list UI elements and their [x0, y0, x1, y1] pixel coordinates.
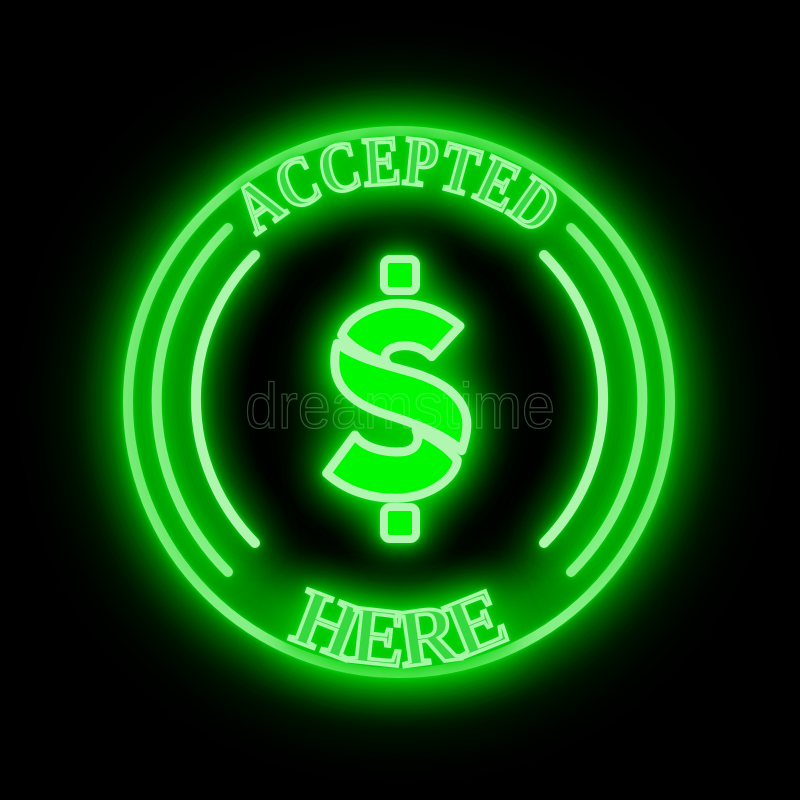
left middle arc — [157, 228, 228, 572]
right middle arc — [571, 228, 642, 572]
ambient ring glow — [159, 162, 639, 642]
right inner arc — [544, 255, 603, 543]
ambient outer glow — [114, 117, 684, 687]
outer ring — [128, 131, 670, 673]
icon: dollar sign — [327, 259, 467, 539]
dollar top square — [384, 259, 416, 291]
ambient text glow — [270, 154, 530, 647]
heading: here: HERE — [262, 558, 534, 700]
ambient dollar glow — [332, 296, 464, 504]
left inner arc — [196, 255, 255, 543]
watermark: dreamstime — [245, 370, 555, 442]
heading: accepted: ACCEPTED — [212, 106, 586, 260]
dollar S body — [327, 303, 467, 498]
dollar bottom square — [384, 507, 416, 539]
